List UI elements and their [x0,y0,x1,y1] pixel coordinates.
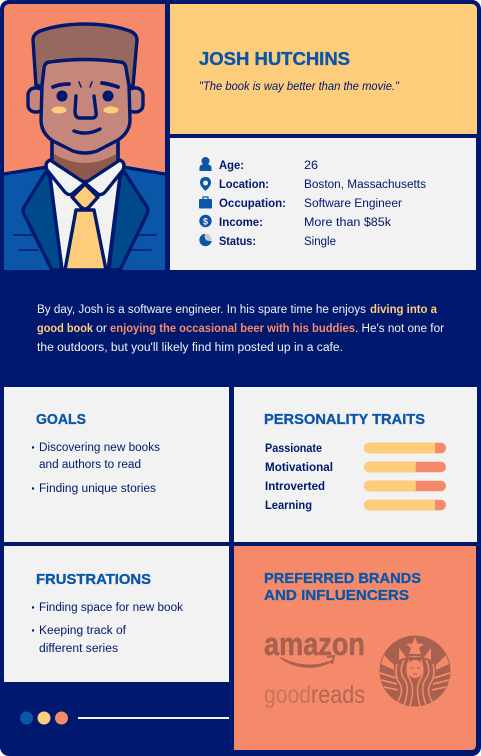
icon: person [200,157,212,171]
bio paragraph: or [96,323,107,335]
goals list [32,442,160,495]
info rows: Software Engineer [304,198,402,210]
bio paragraph: diving into a [370,304,438,316]
icon: briefcase [199,197,212,208]
goals heading: GOALS [36,412,86,428]
trait labels [265,443,333,512]
info rows: Occupation: [219,198,286,210]
frustrations list: Keeping track of [39,625,127,637]
logo: amazon: amazon [264,626,365,662]
goals list: and authors to read [39,459,141,471]
goals list: Discovering new books [39,442,160,454]
info rows: 26 [304,160,318,172]
info rows: Boston, Massachusetts [304,179,426,191]
info rows: Status: [219,236,256,248]
trait labels: Passionate [265,443,322,455]
footer dots [20,712,68,724]
traits heading: PERSONALITY TRAITS [264,412,425,428]
brands heading [264,571,421,604]
icon: dollar coin: $ [203,216,208,226]
panel: preferred brands [234,546,476,750]
footer line [78,717,229,719]
info rows: Location: [219,179,269,191]
frustrations heading: FRUSTRATIONS [36,572,151,588]
icon: dollar coin [199,215,212,227]
trait labels: Motivational [265,462,333,474]
bio paragraph: enjoying the occasional beer with his buddies [110,323,355,335]
frustrations list: different series [39,643,118,655]
bio paragraph: . He's not one for [355,323,444,335]
frustrations list [32,602,183,655]
icon: status moon [199,234,212,246]
icon: man avatar [4,24,165,270]
panel: portrait [4,4,165,270]
brands heading: AND INFLUENCERS [264,588,409,604]
info rows: Age: [219,160,244,172]
trait bars [364,443,446,510]
info rows: More than $85k [304,217,391,229]
trait labels: Introverted [265,481,325,493]
goals list: Finding unique stories [39,483,156,495]
bio paragraph: By day, Josh is a software engineer. In his spare time he enjoys [37,304,366,316]
panel: demographics [170,138,476,270]
info rows: Income: [219,217,263,229]
name heading: JOSH HUTCHINS [199,49,350,69]
frustrations list: Finding space for new book [39,602,183,614]
panel: goals [4,387,229,542]
logo: goodreads [264,681,365,709]
panel: frustrations [4,546,229,682]
panel: name and quote [170,4,477,134]
quote: "The book is way better than the movie." [199,81,400,93]
bio paragraph: the outdoors, but you'll likely find him posted up in a cafe. [37,342,343,354]
info rows [219,160,426,248]
bio paragraph: good book [37,323,94,335]
info rows: Single [304,236,336,248]
panel: personality traits [234,387,477,542]
icon: location pin [200,177,211,191]
trait labels: Learning [265,500,312,512]
logo: goodreads: good [264,681,311,709]
brands heading: PREFERRED BRANDS [264,571,421,587]
logo: starbucks siren [380,636,450,706]
bio paragraph [37,304,444,354]
logo: goodreads: reads [311,681,365,709]
